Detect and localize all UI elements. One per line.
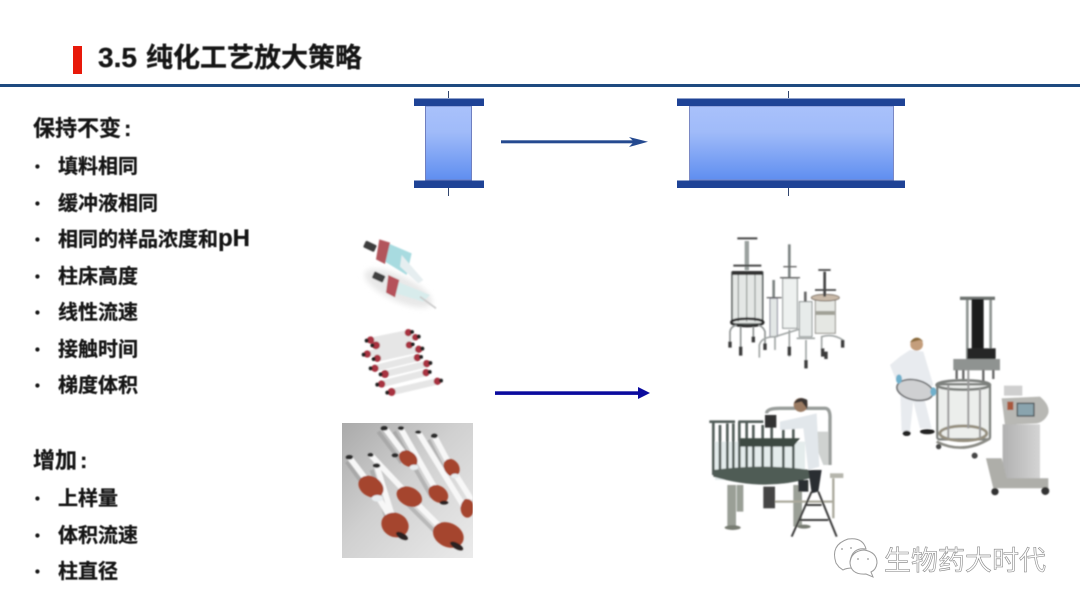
bullet list: keep constant: • xyxy=(35,304,40,320)
icon: WeChat bubbles xyxy=(834,539,877,577)
photo: glass process columns on wheels xyxy=(730,238,843,368)
icon: red accent bar xyxy=(73,46,82,74)
heading: increase: 增加: xyxy=(33,448,87,473)
bullet list: increase xyxy=(35,487,138,583)
heading: keep constant: 保持不变: xyxy=(33,116,131,141)
photo: operator with pilot-scale column and control unit xyxy=(890,297,1049,495)
title bar xyxy=(0,42,1080,87)
bullet list: keep constant xyxy=(35,155,250,397)
photo: rack of medium columns xyxy=(362,329,443,396)
title: 纯化工艺放大策略 xyxy=(146,43,362,73)
bullet list: keep constant: 柱床高度 xyxy=(58,264,138,288)
bullet list: keep constant: • xyxy=(35,195,40,211)
photo: large column with operator on ladder xyxy=(709,398,843,537)
bullet list: keep constant: 接触时间 xyxy=(58,338,138,361)
watermark text: 生物药大时代 xyxy=(884,546,1046,576)
arrow: process scale-up xyxy=(495,387,650,399)
bullet list: increase: • xyxy=(35,490,40,506)
bullet list: keep constant: • xyxy=(35,268,40,284)
bullet list: keep constant: 填料相同 xyxy=(58,155,138,178)
bullet list: increase: • xyxy=(35,527,40,543)
bullet list: keep constant: • xyxy=(35,377,40,393)
photo: large process columns xyxy=(342,423,474,558)
text block: increase xyxy=(33,448,138,583)
bullet list: keep constant: 缓冲液相同 xyxy=(58,192,158,215)
photo: small lab columns xyxy=(360,239,437,315)
text block: keep constant xyxy=(33,116,250,397)
bullet list: increase: • xyxy=(35,563,40,579)
bullet list: keep constant: • xyxy=(35,158,40,174)
bullet list: keep constant: 相同的样品浓度和pH xyxy=(58,225,250,252)
bullet list: increase: 上样量 xyxy=(58,487,118,510)
arrow: scale-up diagram xyxy=(501,137,648,147)
title: 3.5 xyxy=(98,42,137,73)
diagram: small column xyxy=(414,91,484,196)
bullet list: keep constant: 线性流速 xyxy=(58,301,138,324)
diagram: large column xyxy=(677,91,905,196)
bullet list: increase: 体积流速 xyxy=(58,524,138,547)
bullet list: keep constant: 梯度体积 xyxy=(58,374,138,397)
header rule xyxy=(0,84,1080,87)
bullet list: increase: 柱直径 xyxy=(58,560,118,583)
watermark xyxy=(834,539,1046,577)
bullet list: keep constant: • xyxy=(35,231,40,247)
bullet list: keep constant: • xyxy=(35,341,40,357)
